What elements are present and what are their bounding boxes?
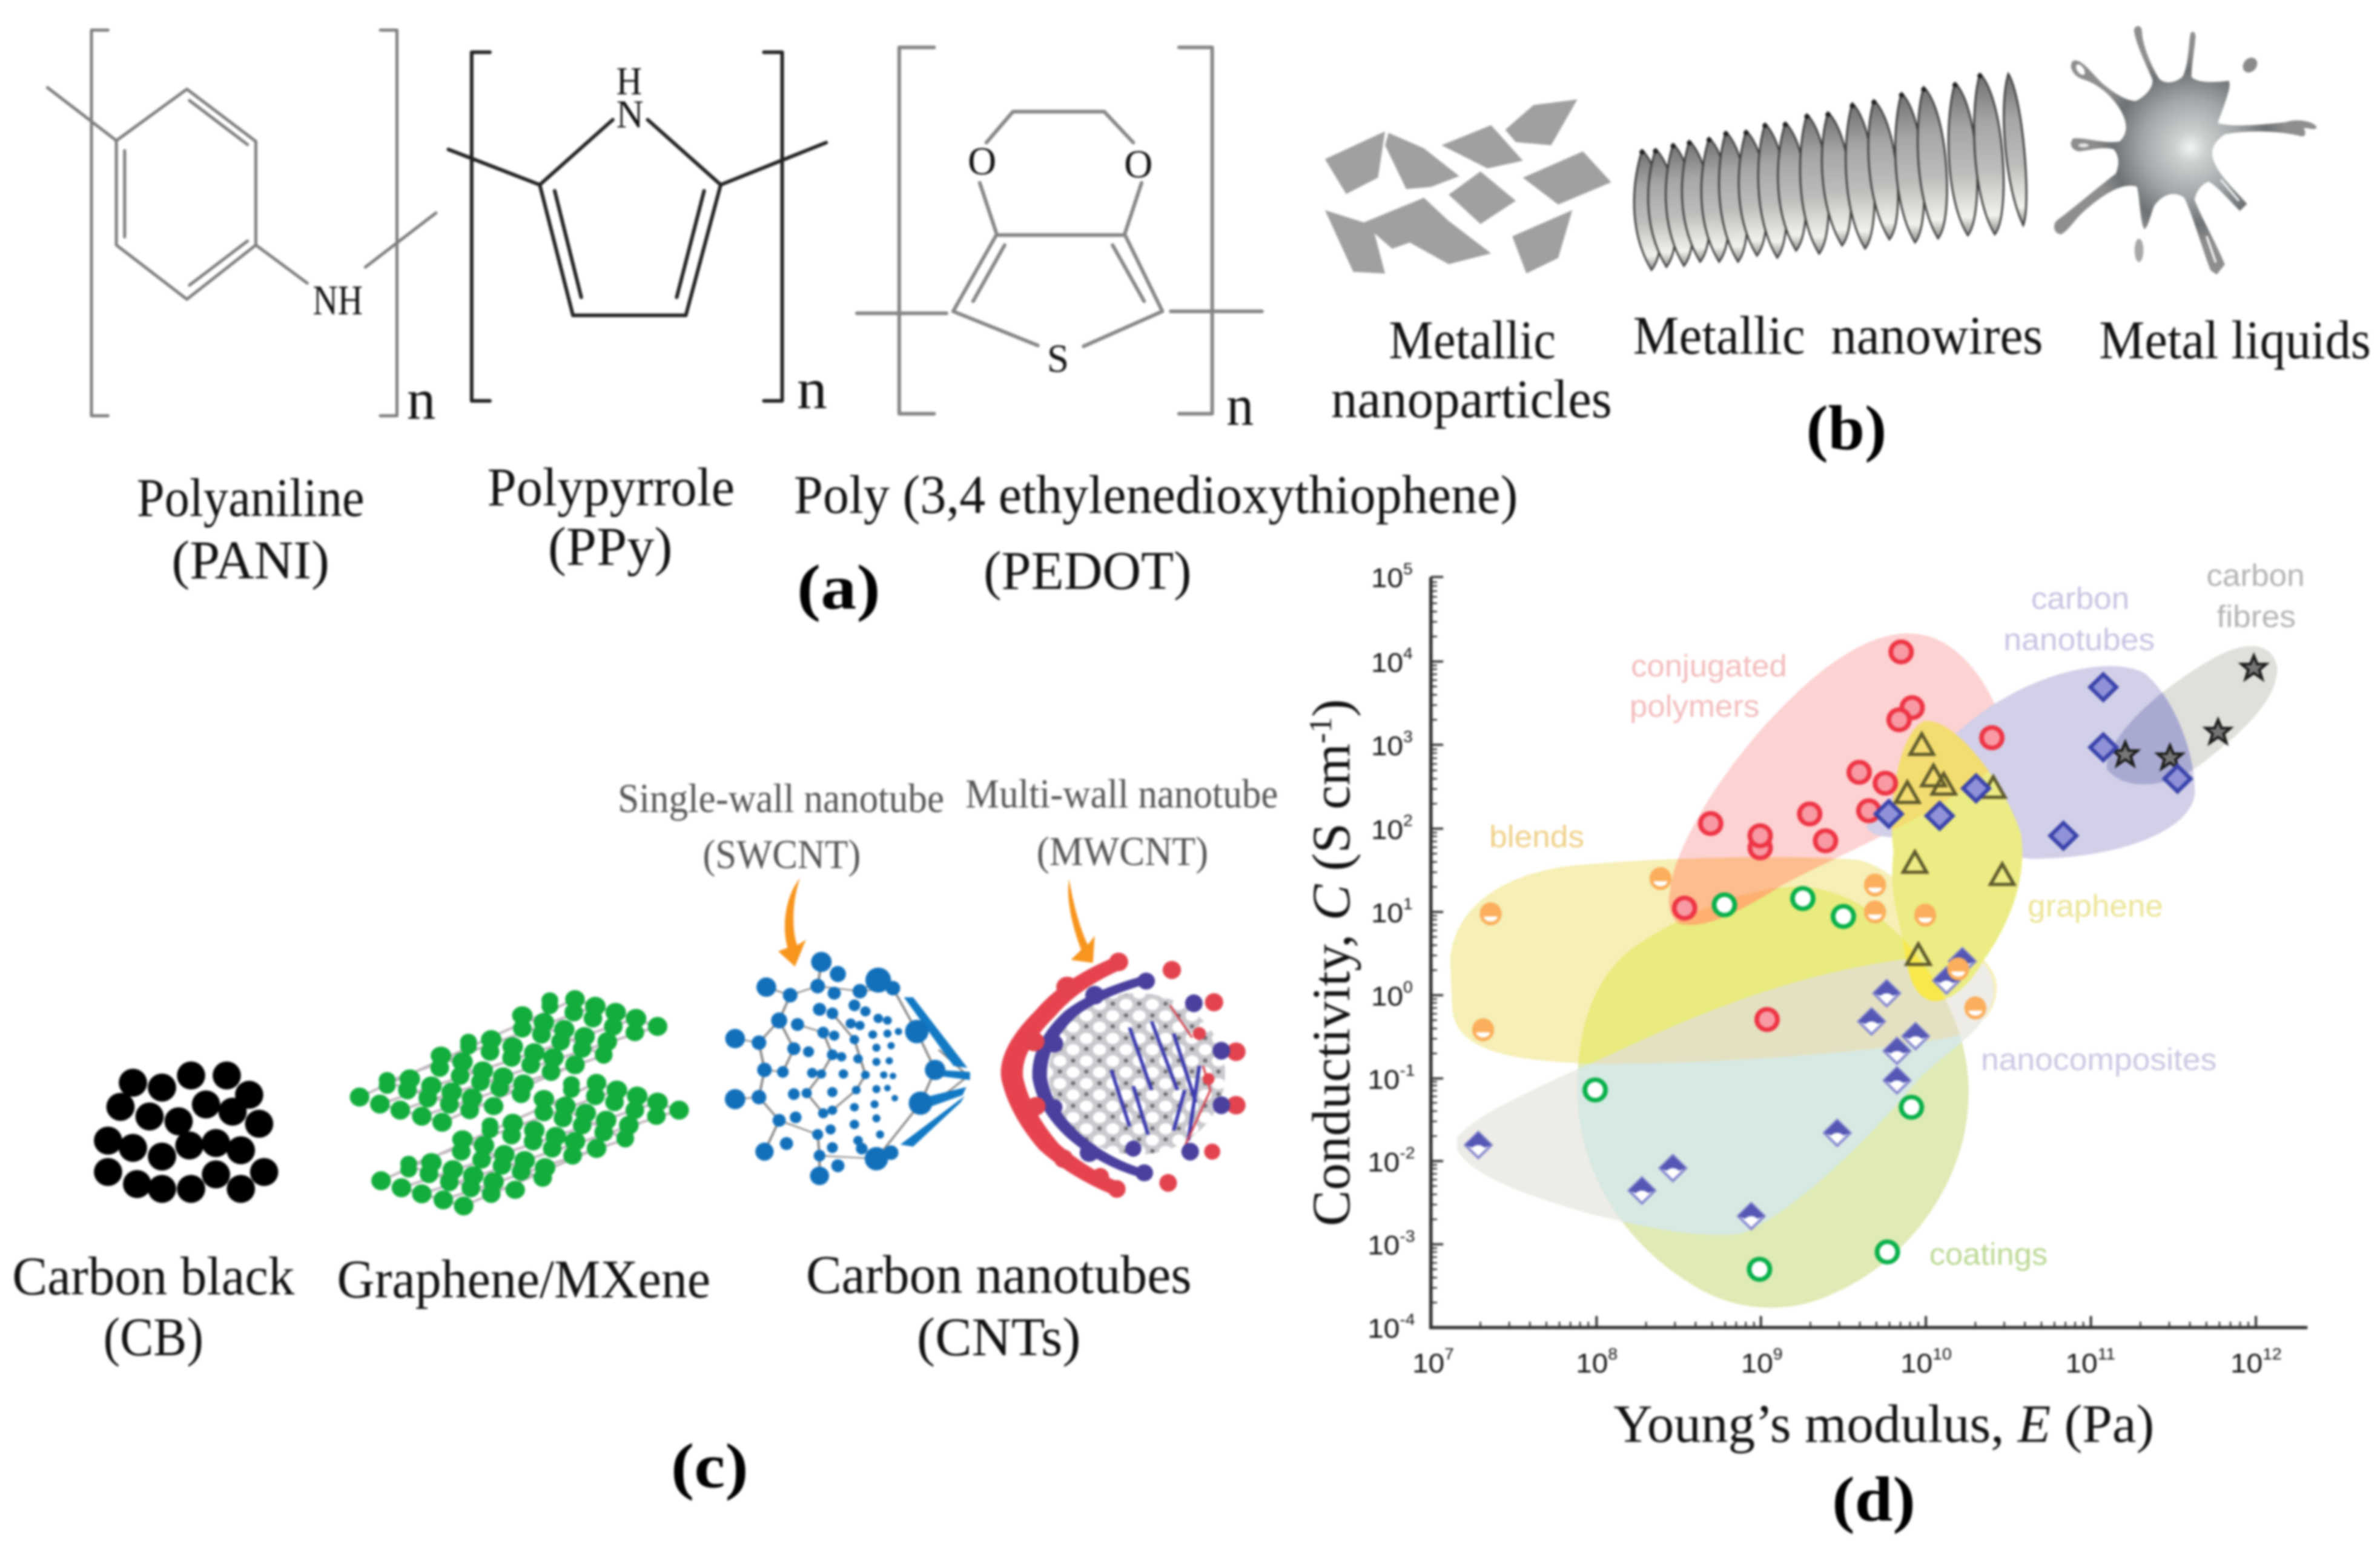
label Single-wall nanotube: Single-wall nanotube	[618, 776, 944, 821]
PANI n subscript: n	[407, 368, 435, 432]
panel b: metallic fillers	[1325, 26, 2371, 463]
y axis tick labels: 10	[1371, 563, 1403, 593]
y axis tick labels: -4	[1400, 1310, 1415, 1329]
label nanoparticles: nanoparticles	[1331, 369, 1612, 429]
icon: metallic nanowire coil	[1634, 73, 2026, 270]
PANI NH label: NH	[312, 277, 363, 324]
conjugated polymer markers	[1674, 642, 2002, 1030]
label Carbon nanotubes: Carbon nanotubes	[806, 1244, 1192, 1305]
panel letter d: (d)	[1832, 1464, 1916, 1534]
carbon fibre star markers	[2113, 656, 2266, 768]
PEDOT chemical structure	[857, 47, 1262, 414]
label Polyaniline: Polyaniline	[137, 467, 365, 528]
label PANI: (PANI)	[171, 530, 329, 590]
region labels: fibres	[2216, 599, 2296, 634]
material regions	[1450, 633, 2277, 1308]
blend half circle markers	[1472, 867, 1986, 1042]
label PEDOT: (PEDOT)	[983, 540, 1192, 601]
label Multi-wall nanotube: Multi-wall nanotube	[965, 771, 1278, 816]
y axis tick labels: 0	[1403, 978, 1413, 996]
axes and ticks	[1431, 577, 2307, 1327]
PEDOT n subscript: n	[1226, 374, 1254, 438]
carbon nanotube diamond markers	[1876, 675, 2190, 848]
icon: carbon black particles	[94, 1062, 278, 1203]
region labels: polymers	[1630, 689, 1759, 724]
label CNTs: (CNTs)	[917, 1307, 1081, 1367]
chart plot area	[1367, 558, 2307, 1378]
x axis tick labels: 7	[1444, 1345, 1454, 1363]
PEDOT O right: O	[1124, 143, 1152, 187]
y axis tick labels: 10	[1367, 1313, 1400, 1344]
y axis tick labels: 2	[1403, 811, 1413, 830]
arrow: to single-wall nanotube	[778, 878, 806, 966]
panel c: carbon fillers	[12, 771, 1278, 1501]
y axis tick labels: 10	[1371, 730, 1403, 761]
region labels: coatings	[1929, 1237, 2048, 1272]
panel letter a: (a)	[797, 552, 881, 623]
y axis tick labels: 10	[1367, 1147, 1400, 1177]
icon: graphene sheets	[351, 991, 688, 1214]
y axis tick labels: 5	[1403, 560, 1413, 578]
PPy chemical structure	[448, 52, 826, 401]
y axis tick labels	[1367, 560, 1415, 1344]
y axis tick labels: 10	[1371, 897, 1403, 928]
graphene triangle markers	[1896, 734, 2014, 965]
x axis tick labels: 10	[1932, 1345, 1952, 1363]
y axis title: )	[1302, 699, 1361, 717]
x axis title: Young’s modulus, E (Pa)	[1613, 1395, 2154, 1454]
PEDOT S: S	[1047, 337, 1069, 381]
label MWCNT: (MWCNT)	[1037, 828, 1208, 874]
y axis tick labels: -1	[1400, 1062, 1415, 1079]
label SWCNT: (SWCNT)	[703, 832, 861, 877]
PPy n subscript: n	[797, 357, 827, 421]
PPy N label: N	[616, 93, 644, 137]
y axis tick labels: 10	[1367, 1064, 1400, 1094]
y axis tick labels: -3	[1400, 1227, 1415, 1245]
y axis tick labels: 10	[1371, 981, 1403, 1011]
y axis tick labels: -2	[1400, 1144, 1415, 1162]
panel letter c: (c)	[671, 1430, 749, 1501]
icon: multi-wall nanotube	[1012, 953, 1246, 1198]
panel d: conductivity vs modulus chart	[1302, 558, 2307, 1534]
PANI chemical structure	[47, 30, 436, 416]
coating ring markers	[1585, 888, 1922, 1280]
x axis tick labels: 9	[1773, 1345, 1783, 1363]
panel a: conducting polymers	[47, 30, 1518, 623]
label Graphene/MXene: Graphene/MXene	[337, 1249, 710, 1310]
label CB: (CB)	[104, 1307, 203, 1367]
region labels: nanocomposites	[1981, 1043, 2216, 1077]
x axis tick labels: 11	[2098, 1345, 2115, 1363]
y axis tick labels: 3	[1403, 728, 1413, 745]
PPy NH label: H	[616, 59, 642, 103]
label Metallic nanowires: Metallic nanowires	[1633, 305, 2043, 366]
x axis tick labels: 10	[1900, 1348, 1932, 1378]
region labels: nanotubes	[2003, 623, 2155, 657]
region labels	[1489, 558, 2305, 1272]
icon: metal liquid splash	[2054, 26, 2316, 274]
region labels: carbon	[2206, 558, 2305, 593]
region labels: conjugated	[1631, 649, 1787, 683]
x axis tick labels	[1412, 1345, 2282, 1378]
region labels: blends	[1489, 820, 1584, 854]
x axis tick labels: 8	[1608, 1345, 1618, 1363]
nanocomposite half diamond markers	[1466, 948, 1975, 1229]
y axis tick labels: 10	[1371, 814, 1403, 845]
region labels: carbon	[2031, 581, 2129, 616]
y axis title: -1	[1303, 717, 1338, 744]
x axis tick labels: 10	[2230, 1348, 2263, 1378]
y axis tick labels: 4	[1403, 644, 1413, 662]
label Metallic: Metallic	[1389, 309, 1556, 370]
arrow: to multi-wall nanotube	[1068, 879, 1095, 963]
x axis tick labels: 10	[1576, 1348, 1608, 1378]
label Polypyrrole: Polypyrrole	[488, 457, 735, 518]
label Carbon black: Carbon black	[12, 1246, 295, 1307]
PEDOT O left: O	[968, 140, 996, 183]
x axis tick labels: 10	[2066, 1348, 2098, 1378]
y axis tick labels: 10	[1367, 1230, 1400, 1260]
y axis title: Conductivity, C (S cm	[1302, 744, 1361, 1226]
x axis tick labels: 10	[1741, 1348, 1773, 1378]
icon: single-wall nanotube	[725, 952, 970, 1185]
x axis tick labels: 10	[1412, 1348, 1444, 1378]
panel letter b: (b)	[1806, 392, 1886, 463]
y axis tick labels: 10	[1371, 647, 1403, 678]
region labels: graphene	[2028, 889, 2163, 923]
label PPy: (PPy)	[548, 516, 672, 576]
x axis tick labels: 12	[2263, 1345, 2282, 1363]
label Poly (3,4 ethylenedioxythiophene): Poly (3,4 ethylenedioxythiophene)	[794, 464, 1518, 525]
icon: metallic nanoparticles	[1325, 99, 1611, 274]
y axis tick labels: 1	[1403, 895, 1413, 913]
